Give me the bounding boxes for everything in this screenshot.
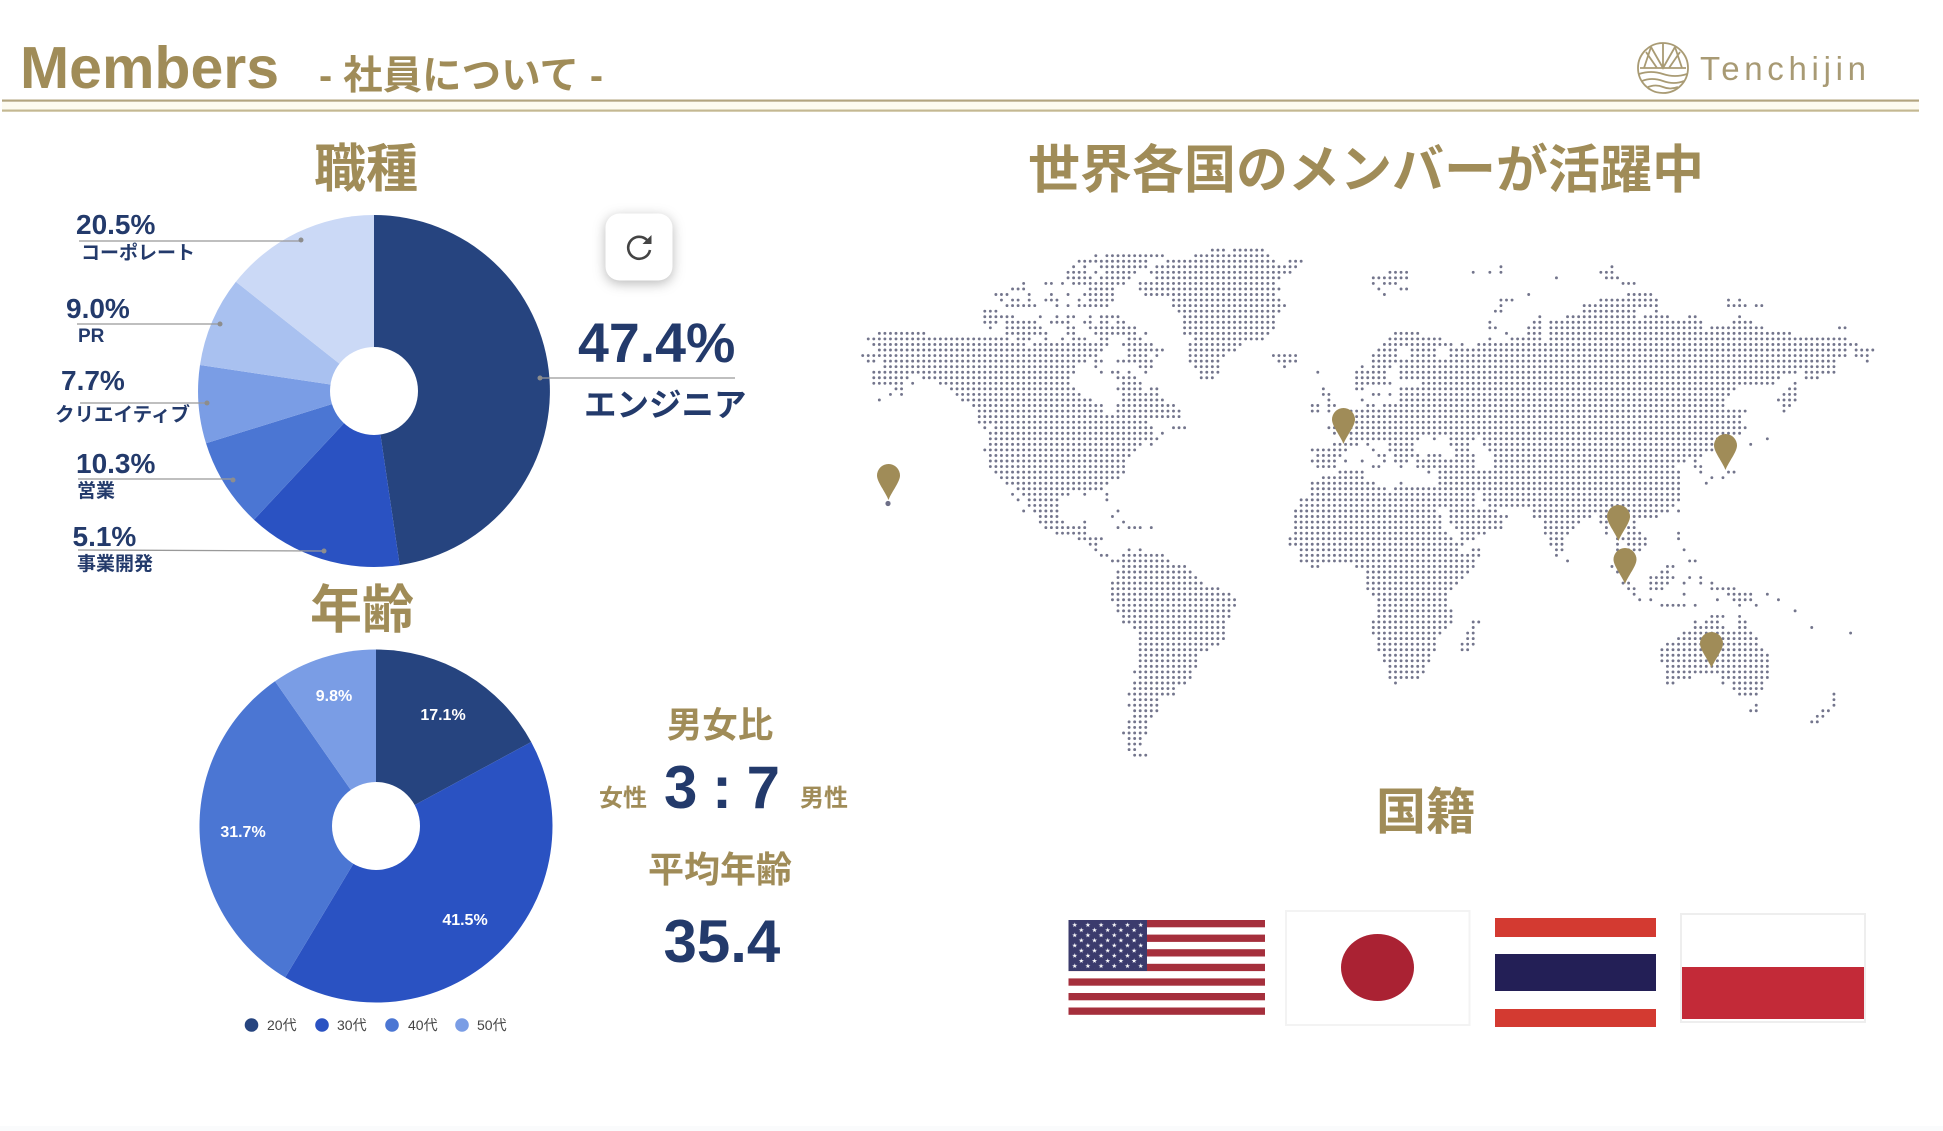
gender ratio [599, 705, 848, 821]
header [2, 35, 1919, 112]
label: engineer: エンジニア [584, 387, 747, 423]
heading: job type: 職種 [314, 141, 418, 199]
flag: Poland [1681, 914, 1865, 1022]
header double rule [2, 100, 1919, 112]
logo: Tenchijin [1638, 43, 1871, 93]
pie chart: age: 31.7% [220, 824, 266, 841]
pin: Pacific [877, 464, 900, 506]
dotted world map [863, 250, 1873, 755]
heading: age: 年齢 [310, 582, 414, 640]
label: business development: 5.1% [72, 521, 136, 552]
label: PR [66, 293, 222, 347]
title: Members: Members [20, 35, 279, 101]
flag: USA [1068, 920, 1265, 1015]
label: PR: 9.0% [66, 293, 130, 324]
label: corporate: コーポレート [81, 241, 195, 264]
pie chart: age: 41.5% [442, 912, 488, 929]
label: creative: 7.7% [61, 365, 125, 396]
gender ratio: 3 : 7 [664, 754, 780, 821]
legend: age [245, 1017, 507, 1033]
heading: world members: 世界各国のメンバーが活躍中 [1028, 142, 1704, 200]
pie chart: job type [198, 215, 550, 567]
label: sales: 10.3% [76, 448, 155, 479]
pin: Thailand [1607, 505, 1630, 541]
label: creative [55, 365, 210, 426]
label: sales: 営業 [77, 480, 115, 502]
label: corporate: 20.5% [76, 209, 155, 240]
subtitle: - 社員について - [319, 54, 603, 98]
pie chart: age: 9.8% [316, 688, 352, 705]
logo: Tenchijin: Tenchijin [1700, 50, 1871, 87]
pie chart: age [199, 650, 552, 1003]
pin: Australia [1700, 632, 1723, 668]
pin: Singapore [1614, 548, 1636, 584]
pin: Europe [1332, 408, 1355, 444]
label: business development [72, 521, 326, 575]
legend: age: 40代 [408, 1017, 438, 1033]
average age: 35.4 [664, 908, 781, 975]
gender ratio: 女性 [599, 785, 647, 812]
refresh button [606, 214, 672, 280]
pie chart: age: 17.1% [420, 707, 466, 724]
flag: Thailand [1495, 918, 1656, 1027]
label: creative: クリエイティブ [55, 403, 190, 426]
flag: Japan [1286, 911, 1470, 1025]
pin: Japan [1714, 434, 1737, 470]
label: PR: PR [78, 326, 105, 347]
average age: 平均年齢 [648, 849, 792, 890]
label: corporate [76, 209, 304, 264]
average age [648, 849, 792, 975]
label: engineer [538, 312, 747, 423]
label: engineer: 47.4% [578, 312, 735, 374]
legend: age: 20代 [267, 1017, 297, 1033]
legend: age: 30代 [337, 1017, 367, 1033]
label: business development: 事業開発 [77, 553, 153, 575]
label: sales [76, 448, 236, 502]
gender ratio: 男性 [800, 785, 848, 812]
legend: age: 50代 [477, 1017, 507, 1033]
gender ratio: 男女比 [667, 705, 773, 745]
map pins [877, 408, 1737, 668]
heading: nationality: 国籍 [1376, 784, 1476, 840]
bottom edge tint [0, 1126, 1943, 1131]
